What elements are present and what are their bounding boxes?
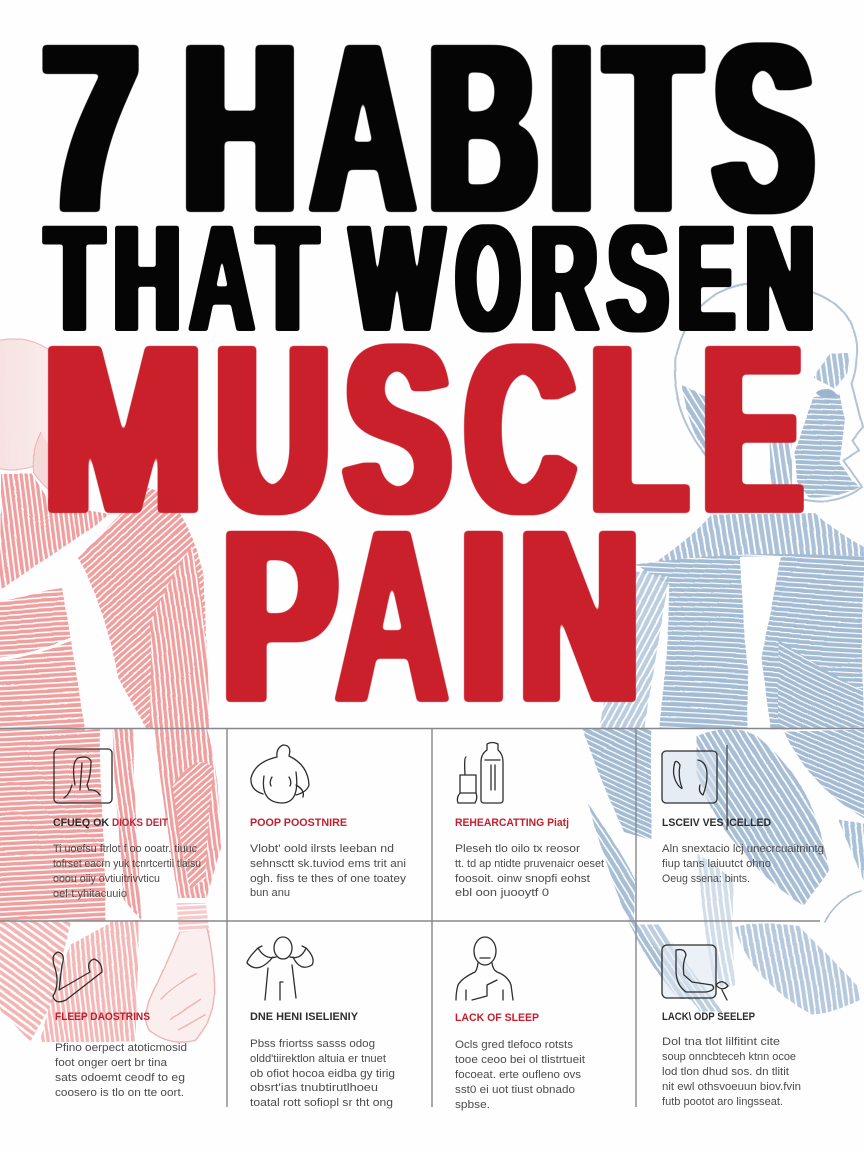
panel: habit 4: [662, 751, 824, 885]
body text: [455, 1039, 585, 1111]
panel: habit 7: [455, 937, 585, 1111]
body text: lod tlon dhud sos. dn tlitit: [662, 1066, 789, 1078]
body text: foosoit. oinw snopfi eohst: [455, 873, 590, 885]
title: 7 HABITS: S: [714, 0, 813, 263]
title: MUSCLE: M: [43, 295, 203, 564]
body text: sehnsctt sk.tuviod ems trit ani: [250, 858, 406, 870]
icon: person with arms raised: [247, 937, 313, 1000]
body text: Ti uoefsu ftrlot f oo ooatr. tiuuc: [53, 843, 197, 855]
illustration: red muscular figure on the left: [0, 341, 222, 1042]
icon: hunched figure: [251, 745, 309, 803]
icon: bottle and dropper: [457, 742, 503, 803]
body text: oel-t:yhitacuuio: [53, 888, 127, 900]
title: MUSCLE: E: [703, 296, 802, 564]
title: THAT WORSEN: N: [746, 194, 814, 362]
heading: DNE HENI ISELIENIY: [250, 1011, 359, 1023]
heading: POOP POOSTNIRE: [250, 817, 347, 829]
title: THAT WORSEN: H: [114, 195, 180, 363]
title: MUSCLE: S: [345, 296, 450, 564]
body text: foot onger oert br tina: [55, 1057, 168, 1069]
body text: fiup tans laiuutct ohno: [662, 858, 771, 870]
title: 7 HABITS: A: [310, 0, 416, 263]
body text: oldd'tiirektlon altuia er tnuet: [250, 1053, 386, 1065]
body text: tt. td ap ntidte pruvenaicr oeset: [455, 858, 604, 870]
heading: LACK OF SLEEP: [455, 1012, 539, 1024]
illustration: hand: [146, 930, 213, 1042]
panel: habit 5: [53, 952, 187, 1099]
body text: ob ofiot hocoa eidba gy tirig: [250, 1068, 395, 1080]
title: PAIN: P: [223, 478, 337, 753]
title: PAIN: A: [336, 478, 448, 754]
heading: LACK\ ODP SEELEP: [662, 1011, 755, 1023]
body text: Pbss friortss sasss odog: [250, 1038, 375, 1050]
title: THAT WORSEN: T: [46, 195, 103, 362]
heading: CFUEQ OK: [53, 817, 109, 829]
heading: DIOKS DEIT: [112, 817, 168, 829]
panel: habit 6: [247, 937, 395, 1109]
heading: LSCEIV VES ICELLED: [662, 817, 771, 829]
body text: sst0 ei uot tiust obnado: [455, 1084, 575, 1096]
body text: obsrt'ias tnubtirutlhoeu: [250, 1082, 378, 1094]
heading: FLEEP DAOSTRINS: [55, 1011, 150, 1023]
title: THAT WORSEN: [46, 194, 814, 363]
body text: soup onncbteceh ktnn ocoe: [662, 1051, 796, 1063]
title: 7 HABITS: [43, 0, 813, 263]
heading: REHEARCATTING Piatj: [455, 817, 569, 829]
title: MUSCLE: C: [466, 296, 574, 564]
title: THAT WORSEN: E: [678, 194, 734, 362]
body text: [662, 843, 824, 885]
body text: Dol tna tlot lilfitint cite: [662, 1036, 780, 1048]
icon: arm in square: [662, 945, 728, 1000]
title: 7 HABITS: B: [429, 0, 537, 263]
title: PAIN: I: [461, 478, 506, 753]
body text: futb pootot aro lingsseat.: [662, 1096, 783, 1108]
body text: Vlobt' oold ilrsts leeban nd: [250, 843, 394, 855]
title: 7 HABITS: H: [184, 0, 296, 262]
body text: tofrset eacrn yuk tcnrtcertii tlaisu: [53, 858, 201, 870]
title: THAT WORSEN: R: [531, 196, 597, 363]
title: THAT WORSEN: T: [258, 194, 317, 362]
title: 7 HABITS: I: [549, 0, 594, 263]
body text: [455, 843, 604, 899]
body text: [55, 1042, 187, 1099]
title: MUSCLE: [43, 295, 802, 564]
icon: back in square: [54, 749, 112, 803]
icon: bent arm: [53, 952, 102, 1002]
body text: focoeat. erte oufleno ovs: [455, 1069, 582, 1081]
body text: ebl oon juooytf 0: [455, 887, 549, 899]
panel: habit 1: [53, 749, 201, 900]
body text: [662, 1036, 801, 1108]
body text: Oeug ssena: bints.: [662, 873, 750, 885]
grid lines: [0, 728, 864, 1107]
body text: Ocls gred tlefoco rotsts: [455, 1039, 574, 1051]
body text: bun anu: [250, 887, 290, 899]
title: THAT WORSEN: W: [352, 194, 443, 362]
body text: toatal rott sofiopl sr tht ong: [250, 1097, 393, 1109]
body text: nit ewl othsvoeuun biov.fvin: [662, 1081, 801, 1093]
body text: Pleseh tlo oilo tx reosor: [455, 843, 580, 855]
body text: ooou oiiy ovtiuitrivvticu: [53, 873, 160, 885]
body text: coosero is tlo on tte oort.: [55, 1087, 184, 1099]
body text: sats odoemt ceodf to eg: [55, 1072, 185, 1084]
body text: Aln snextacio lcj unecrcuaitnintg: [662, 843, 824, 855]
body text: Pfino oerpect atoticmosid: [55, 1042, 187, 1054]
icon: tired person: [456, 937, 513, 1000]
body text: [250, 843, 407, 899]
panel: habit 2: [250, 745, 407, 899]
body text: ogh. fiss te thes of one toatey: [250, 873, 407, 885]
panel: habit 8: [662, 945, 801, 1108]
body text: [250, 1038, 395, 1109]
body text: tooe ceoo bei ol tlistrtueit: [455, 1054, 585, 1066]
title: MUSCLE: L: [590, 296, 687, 564]
title: MUSCLE: U: [216, 295, 330, 563]
title: 7 HABITS: T: [607, 0, 699, 262]
title: PAIN: [223, 478, 639, 754]
title: THAT WORSEN: S: [608, 195, 668, 363]
body text: [53, 843, 201, 900]
panel: habit 3: [455, 742, 604, 899]
icon: ears in square: [662, 751, 717, 803]
body text: spbse.: [455, 1099, 490, 1111]
title: THAT WORSEN: A: [189, 196, 255, 363]
title: THAT WORSEN: O: [457, 194, 519, 362]
title: PAIN: N: [520, 479, 639, 754]
illustration: blue muscular figure on the right: [583, 283, 864, 1015]
title: 7 HABITS: 7: [43, 0, 138, 263]
